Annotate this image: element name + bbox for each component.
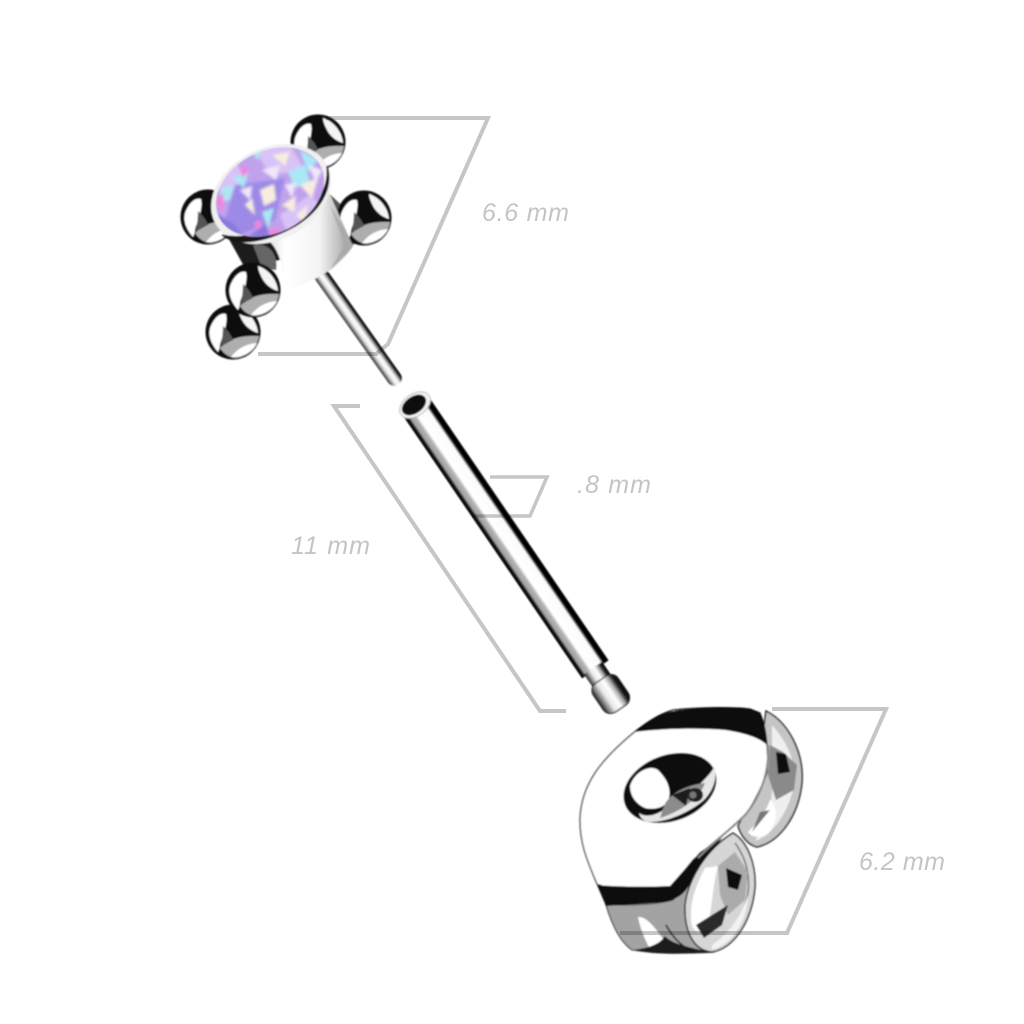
dimension bracket: 11 mm <box>334 406 566 711</box>
barbell tube <box>395 386 633 717</box>
bezel cylinder <box>268 190 353 290</box>
plate top dark band <box>634 708 767 745</box>
plate lower grey band <box>606 880 714 953</box>
butterfly back <box>580 708 802 954</box>
dark arm <box>225 232 280 268</box>
opal ball top <box>180 114 405 389</box>
plate hole <box>614 741 726 835</box>
bezel rim <box>194 124 348 264</box>
label: 6.6 mm: 6.6 mm <box>482 199 569 227</box>
dimension bracket: 6.6 mm <box>258 118 488 354</box>
lower wing <box>685 833 755 952</box>
plate lower dark band <box>597 838 722 906</box>
dimension bracket: .8 mm <box>472 477 547 516</box>
label: 6.2 mm: 6.2 mm <box>859 848 945 876</box>
tube shaft <box>402 396 609 678</box>
tube tip <box>581 660 633 717</box>
arm joints <box>320 185 354 245</box>
opal stone <box>215 146 325 238</box>
label: .8 mm: .8 mm <box>577 471 651 499</box>
tube end opening <box>395 386 435 424</box>
label: 11 mm: 11 mm <box>291 532 370 560</box>
upper wing <box>738 711 802 847</box>
post pin <box>306 258 405 389</box>
dimension bracket: 6.2 mm <box>620 709 886 933</box>
main plate <box>580 708 768 900</box>
plate right edge line <box>698 745 768 858</box>
balls <box>290 114 346 170</box>
